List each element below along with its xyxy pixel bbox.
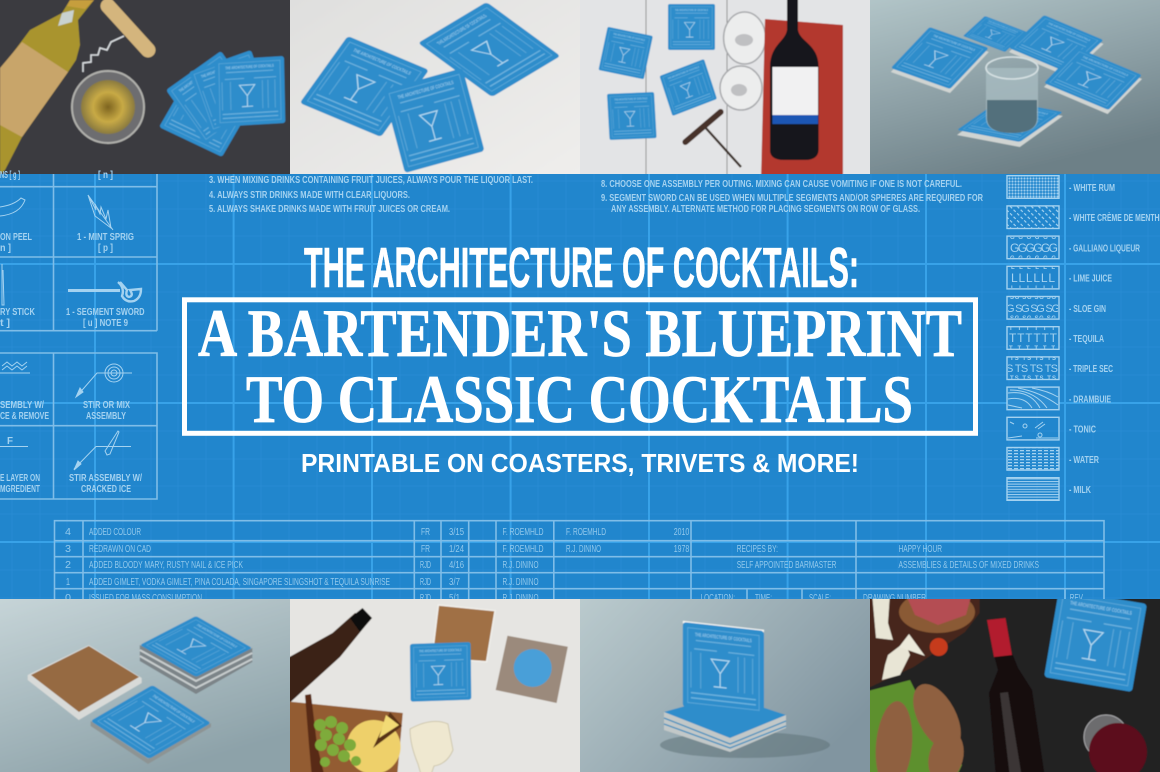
swatch: lime juice: LLLLLL	[1011, 286, 1055, 292]
panel: assembly techniques table: STIR ASSEMBLY W/	[69, 473, 142, 484]
icon: tile stack	[664, 706, 786, 752]
photo: three coasters on white	[284, 0, 586, 180]
table: revision block: RJD	[420, 593, 431, 604]
photo: red wine and coasters on white wood	[574, 0, 876, 180]
text block: mixing notes right: 9. SEGMENT SWORD CAN BE USED WHEN MULTIPLE SEGMENTS AND/OR SPHERES ARE REQUIRED FOR	[601, 193, 984, 204]
swatch: galliano liqueur: GGGGGG	[1010, 256, 1056, 262]
icon: ice pick stir	[74, 431, 131, 470]
icon: taupe coaster holder	[496, 636, 568, 703]
swatch: triple sec: - TRIPLE SEC	[1069, 364, 1113, 375]
swatch: sloe gin: SG SG SG SG	[1010, 316, 1056, 322]
swatch: sloe gin	[1006, 295, 1106, 322]
table: revision block: 5/1	[449, 593, 460, 604]
panel: assembly techniques table: F	[7, 436, 13, 447]
swatch: tequila: TTTTTT	[1009, 326, 1055, 332]
icon: bread slices	[875, 683, 964, 772]
subtitle: PRINTABLE ON COASTERS, TRIVETS & MORE!	[301, 448, 859, 478]
table: revision block: ADDED COLOUR	[89, 527, 141, 538]
table: revision block: 3	[65, 544, 71, 555]
icon: white wine glass	[410, 721, 453, 772]
panel: assembly techniques table: CRACKED ICE	[81, 484, 131, 495]
photo: isometric tile stacks with cork back	[0, 593, 296, 772]
heading box: a bartender's blueprint	[184, 295, 976, 437]
panel: garnish symbols table: [ n ]	[98, 170, 113, 181]
panel: blueprint band	[0, 174, 1160, 599]
icon: coaster stack	[140, 616, 252, 694]
table: revision block: 4/16	[449, 560, 464, 571]
table: revision block: FR	[421, 527, 430, 538]
coasters: fanned stack	[159, 50, 285, 157]
table: revision block: SELF APPOINTED BARMASTER	[737, 560, 836, 571]
swatch: sloe gin: - SLOE GIN	[1069, 304, 1106, 315]
photo: white wine and coasters on slate	[0, 0, 296, 180]
panel: garnish symbols table: [ p ]	[98, 243, 113, 254]
swatch: tequila: TTTTTT	[1009, 331, 1058, 345]
icon: glass of water	[986, 57, 1038, 133]
icon: blue coaster	[1044, 589, 1147, 692]
heading box: a bartender's blueprint: TO CLASSIC COCKTAILS	[246, 361, 913, 437]
swatch: drambuie: - DRAMBUIE	[1069, 394, 1111, 406]
swatch: milk: - MILK	[1069, 485, 1092, 496]
swatch: drambuie	[1007, 387, 1111, 410]
table: revision block: ISSUED FOR MASS CONSUMPTION	[89, 593, 202, 604]
table: revision block: RECIPES BY:	[737, 544, 778, 555]
panel: garnish symbols table: NS [ g ]	[0, 170, 20, 181]
icon: napkin	[761, 19, 843, 180]
table: revision block: TIME:	[755, 593, 772, 604]
table: revision block: FR	[421, 544, 430, 555]
swatch: white rum	[1007, 176, 1115, 198]
table: revision block: ADDED BLOODY MARY, RUSTY NAIL & ICE PICK	[89, 560, 243, 571]
icon: single coaster	[91, 685, 211, 764]
panel: assembly techniques table: SEMBLY W/	[0, 400, 44, 411]
icon: grapes	[314, 716, 361, 767]
panel: garnish symbols table: 1 - SEGMENT SWORD	[66, 307, 144, 318]
panel: garnish symbols table: n ]	[0, 243, 11, 254]
swatch: triple sec: TS TS TS TS	[1010, 356, 1056, 362]
heading box: a bartender's blueprint: A BARTENDER'S BLUEPRINT	[198, 295, 962, 371]
icon: cherry stick	[2, 264, 4, 305]
icon: stir symbol	[76, 364, 132, 397]
text block: mixing notes right: ANY ASSEMBLY. ALTERNATE METHOD FOR PLACING SEGMENTS ON ROW OF GLASS.	[611, 204, 920, 215]
table: revision block: F. ROEMHLD	[502, 544, 544, 555]
swatch: white rum: - WHITE RUM	[1069, 183, 1115, 194]
table: revision block: R.J. DININO	[566, 544, 601, 555]
panel: assembly techniques table: CE & REMOVE	[0, 411, 49, 422]
swatch: triple sec: TS TS TS TS	[1010, 376, 1056, 382]
table: revision block: SCALE:	[809, 593, 831, 604]
panel: garnish symbols table: t ]	[0, 318, 10, 329]
panel: garnish symbols table: RY STICK	[0, 307, 36, 318]
table: revision block: REV	[1070, 593, 1083, 604]
table: revision block	[54, 521, 1104, 605]
icon: wine bottle	[290, 608, 372, 703]
table: revision block: 1/24	[449, 544, 464, 555]
table: revision block: ASSEMBLIES & DETAILS OF MIXED DRINKS	[898, 560, 1039, 571]
swatch: tonic	[1007, 417, 1096, 440]
icon: mint sprig	[88, 195, 113, 230]
icon: wave lines	[0, 362, 30, 373]
swatch: tequila	[1007, 326, 1104, 352]
table: revision block: RJD	[420, 560, 431, 571]
icon: red wine glass	[1084, 715, 1147, 772]
text block: mixing notes right	[601, 179, 984, 215]
icon: green leaf	[864, 680, 962, 772]
swatch: tequila: - TEQUILA	[1069, 334, 1104, 345]
table: revision block: 2	[65, 560, 71, 571]
panel: assembly techniques table	[0, 353, 157, 499]
panel: garnish symbols table: 1 - MINT SPRIG	[77, 232, 134, 243]
icon: red wine bottle	[770, 0, 819, 160]
icon: corkscrew	[83, 6, 148, 72]
table: revision block: LOCATION:	[700, 593, 735, 604]
table: revision block: 4	[65, 527, 71, 538]
icon: cutting board	[284, 701, 403, 772]
table: revision block: F. ROEMHLD	[566, 527, 606, 538]
swatch: galliano liqueur	[1007, 235, 1141, 262]
swatch: water: - WATER	[1069, 455, 1100, 466]
table: revision block: 0	[65, 593, 71, 604]
panel: garnish symbols table	[0, 170, 157, 331]
swatch: milk	[1007, 478, 1092, 500]
panel: garnish symbols table: ON PEEL	[0, 232, 32, 243]
icon: cheese	[347, 712, 402, 772]
text block: mixing notes left	[209, 175, 533, 215]
panel: garnish symbols table: [ u ] NOTE 9	[83, 318, 128, 329]
table: revision block: F. ROEMHLD	[502, 527, 544, 538]
icon: vintage corkscrew	[685, 112, 741, 167]
table: revision block: 1978	[674, 544, 690, 555]
swatch: tequila: TTTTTT	[1009, 346, 1055, 352]
text block: mixing notes left: 3. WHEN MIXING DRINKS CONTAINING FRUIT JUICES, ALWAYS POUR THE LIQUOR LAST.	[209, 175, 533, 186]
text block: mixing notes left: 5. ALWAYS SHAKE DRINKS MADE WITH FRUIT JUICES OR CREAM.	[209, 204, 450, 215]
swatch: lime juice: LLLLLL	[1011, 265, 1055, 271]
table: revision block: 1	[66, 577, 70, 588]
icon: upright coaster	[683, 622, 764, 716]
table: revision block: R.J. DININO	[502, 593, 539, 604]
table: revision block: DRAWING NUMBER	[863, 593, 926, 604]
panel: assembly techniques table: ASSEMBLY	[86, 411, 126, 422]
icon: wine glasses	[720, 12, 766, 110]
icon: wine glass from above	[72, 71, 144, 143]
icon: blue coaster	[410, 642, 471, 702]
icon: knife	[305, 694, 325, 772]
table: revision block: 2010	[674, 527, 690, 538]
icon: wooden board	[870, 599, 980, 688]
icon: red wine bottle	[987, 618, 1045, 772]
swatch: triple sec: S TS TS TS	[1006, 363, 1058, 375]
table: revision block: RJD	[420, 577, 431, 588]
icon: bread with ham	[898, 599, 976, 634]
icon: segment sword	[68, 282, 141, 301]
swatch: triple sec	[1006, 356, 1113, 382]
swatch: lime juice	[1007, 265, 1112, 292]
swatch: tonic: - TONIC	[1069, 424, 1096, 436]
photo: isometric tiles and glass of water	[864, 0, 1160, 180]
photo: coasters with bottle, cheese and grapes	[284, 593, 586, 772]
swatch: lime juice: - LIME JUICE	[1069, 274, 1112, 284]
text block: mixing notes right: 8. CHOOSE ONE ASSEMBLY PER OUTING. MIXING CAN CAUSE VOMITING IF ONE IS NOT CAREFUL.	[601, 179, 962, 190]
photo: upright tile on stack	[574, 593, 876, 772]
swatch: sloe gin: G SG SG SG	[1006, 303, 1060, 315]
swatch: lime juice: LLLLLL	[1011, 271, 1055, 285]
table: revision block: 3/15	[449, 527, 464, 538]
table: revision block: R.J. DININO	[502, 560, 539, 571]
icon: cheese and tomato	[872, 593, 948, 680]
icon: lemon peel	[0, 198, 25, 216]
table: revision block: REDRAWN ON CAD	[89, 544, 151, 555]
icon: white wine bottle	[0, 0, 94, 174]
swatch: white creme de menthe	[1007, 206, 1160, 228]
icon: cork tile	[432, 605, 495, 662]
swatch: sloe gin: SG SG SG SG	[1010, 295, 1056, 301]
swatch: galliano liqueur: GGGGGG	[1010, 241, 1058, 255]
photo: charcuterie, red wine and coaster	[864, 589, 1160, 772]
legend: ingredient swatches	[1006, 176, 1160, 500]
table: revision block: ADDED GIMLET, VODKA GIMLET, PINA COLADA, SINGAPORE SLINGSHOT & TEQUILA SUNRISE	[89, 577, 390, 588]
icon: cork tile	[28, 645, 142, 720]
table: revision block: HAPPY HOUR	[898, 544, 942, 555]
table: revision block: R.J. DININO	[502, 577, 539, 588]
table: revision block: 3/7	[449, 577, 460, 588]
text block: mixing notes left: 4. ALWAYS STIR DRINKS MADE WITH CLEAR LIQUORS.	[209, 190, 410, 201]
swatch: water	[1007, 448, 1100, 470]
panel: assembly techniques table: STIR OR MIX	[83, 400, 130, 411]
swatch: galliano liqueur: GGGGGG	[1010, 235, 1056, 241]
panel: assembly techniques table: MGREDIENT	[0, 484, 40, 495]
panel: assembly techniques table: E LAYER ON	[0, 473, 40, 484]
